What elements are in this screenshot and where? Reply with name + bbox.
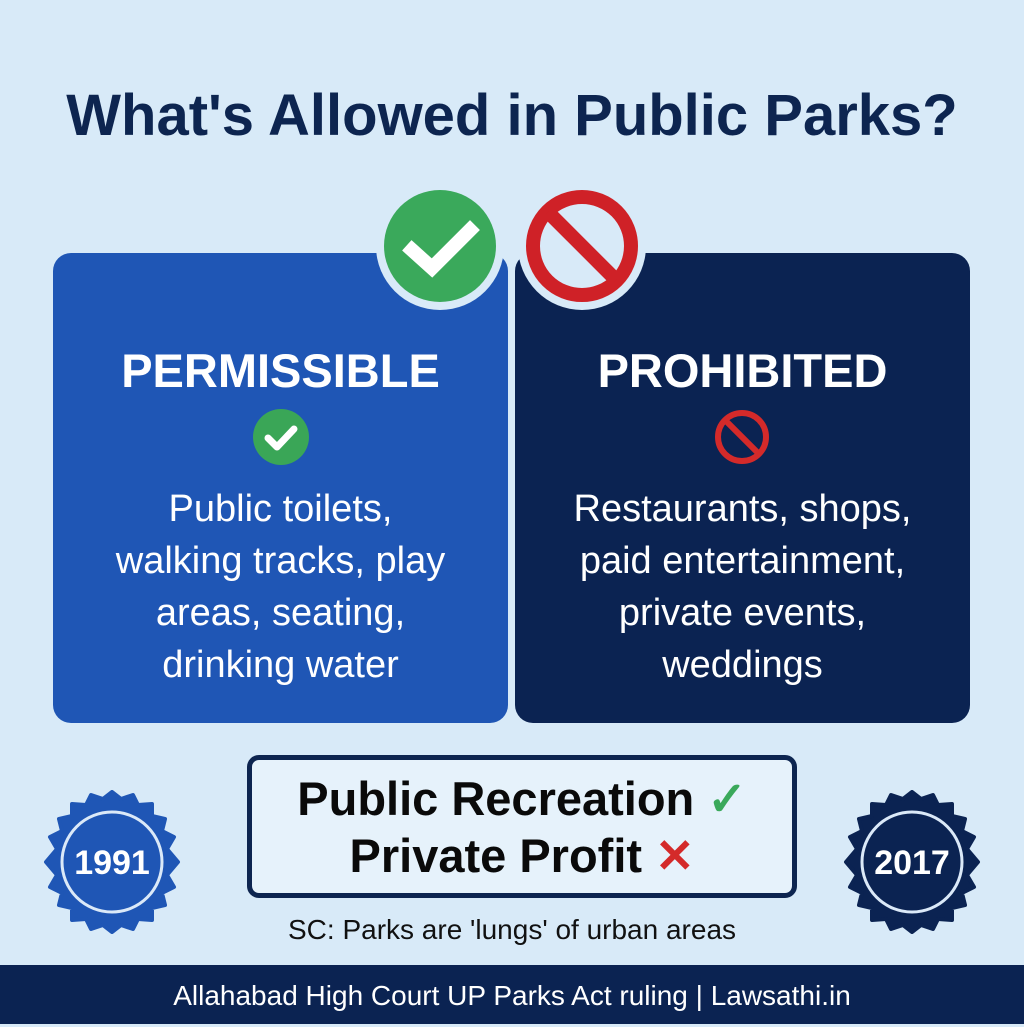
heading: prohibited: PROHIBITED bbox=[598, 344, 887, 397]
text: permissible list: drinking water bbox=[162, 644, 399, 686]
text: permissible list bbox=[116, 488, 446, 686]
icon: big check bbox=[376, 190, 503, 310]
footer: Allahabad High Court UP Parks Act ruling | Lawsathi.in bbox=[173, 980, 851, 1011]
badge 1991: 1991 bbox=[74, 844, 150, 882]
text: prohibited list: Restaurants, shops, bbox=[574, 488, 911, 530]
caption: SC: Parks are 'lungs' of urban areas bbox=[288, 914, 736, 945]
badge 2017: 2017 bbox=[874, 844, 950, 882]
text: permissible list: areas, seating, bbox=[156, 592, 405, 634]
icon: small check bbox=[253, 409, 309, 465]
heading: permissible: PERMISSIBLE bbox=[121, 344, 440, 397]
icon: small no bbox=[715, 410, 769, 464]
title: What's Allowed in Public Parks? bbox=[66, 83, 958, 148]
panel: permissible bbox=[53, 253, 508, 723]
footer bbox=[0, 965, 1024, 1024]
badge 1991 bbox=[44, 790, 180, 934]
text: prohibited list: private events, bbox=[619, 592, 866, 634]
text: prohibited list: weddings bbox=[662, 644, 823, 686]
callout box: Private Profit ✕ bbox=[350, 829, 694, 882]
badge 2017 bbox=[844, 790, 980, 934]
icon: big prohibited bbox=[520, 190, 646, 310]
text: prohibited list bbox=[574, 488, 911, 686]
panel: prohibited bbox=[515, 253, 970, 723]
text: prohibited list: paid entertainment, bbox=[580, 540, 905, 582]
callout box bbox=[247, 755, 797, 898]
callout box: Public Recreation ✓ bbox=[297, 772, 747, 825]
text: permissible list: Public toilets, bbox=[169, 488, 392, 530]
text: permissible list: walking tracks, play bbox=[116, 540, 445, 582]
